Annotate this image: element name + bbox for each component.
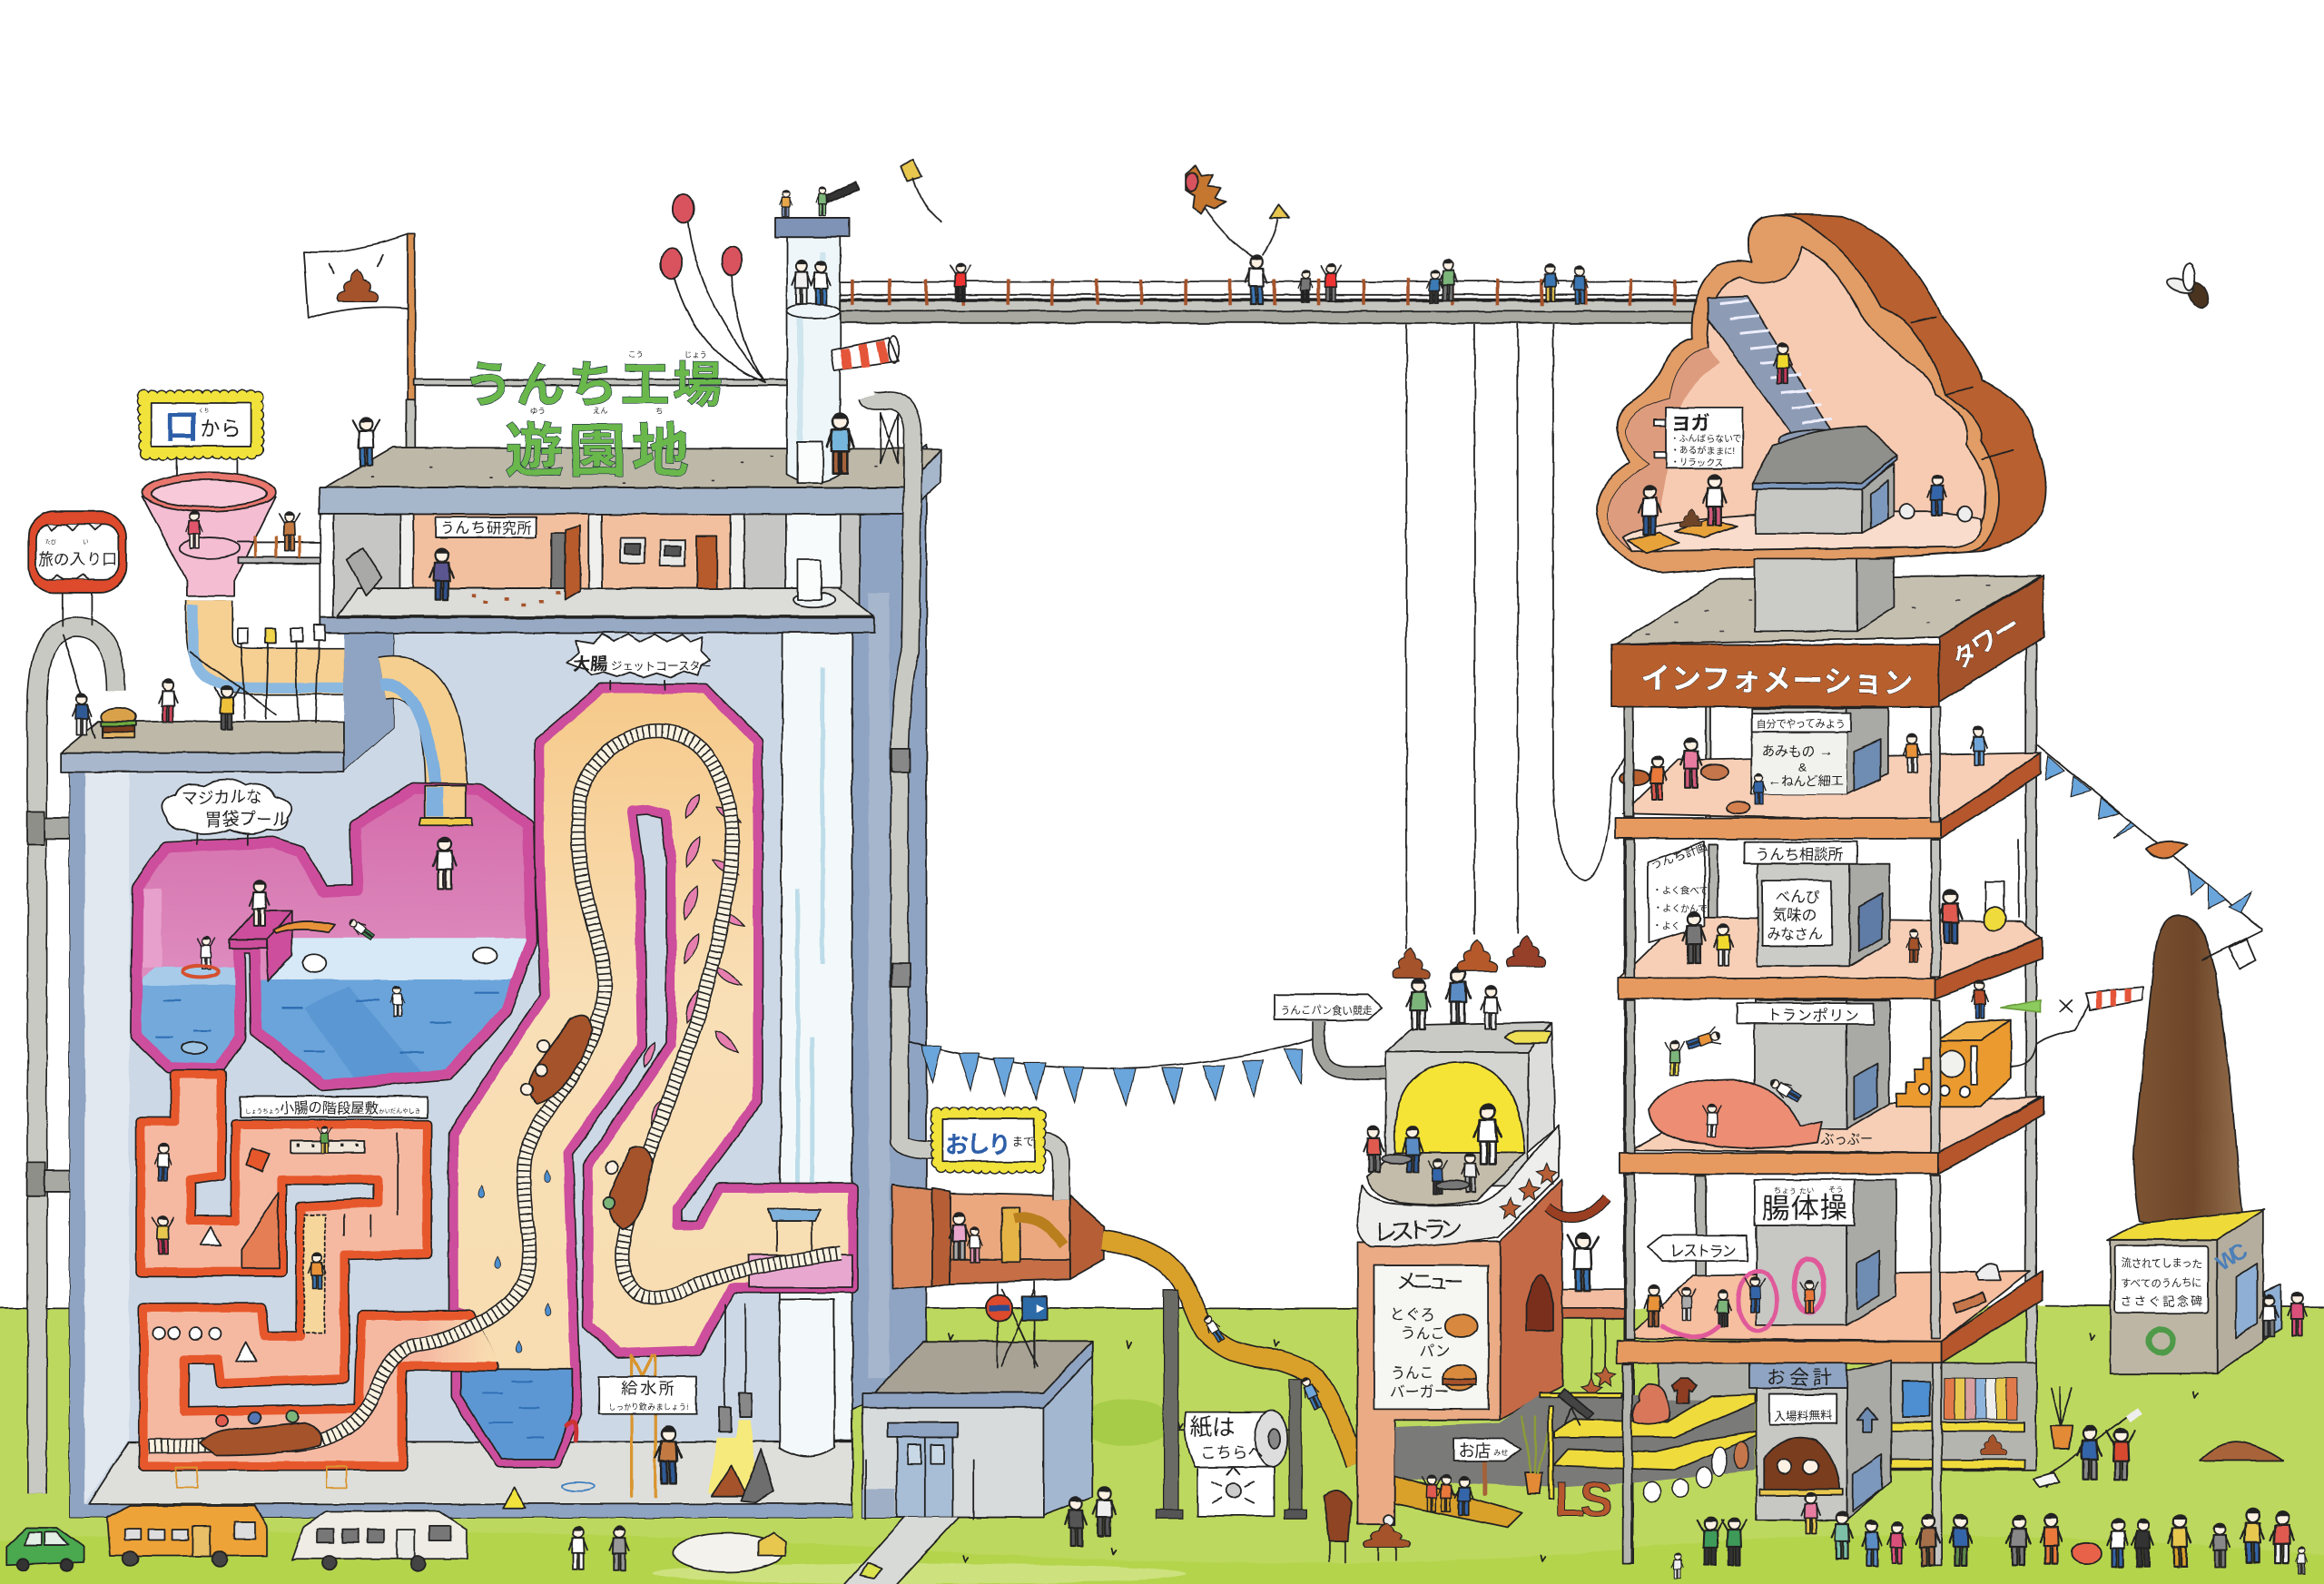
grass extras: dirt mound and flowerpot bbox=[2034, 1293, 2307, 1488]
board: うんち計画: うんち計画 bbox=[1649, 840, 1709, 872]
sign: 腸体操: たい bbox=[1799, 1186, 1814, 1195]
tower floor 2 trampoline: ぶっぷー bbox=[1820, 1133, 1874, 1147]
tower floor 4 bbox=[1616, 708, 2041, 839]
reservoir water bbox=[461, 1369, 572, 1460]
menu poster: パン bbox=[1420, 1343, 1450, 1360]
stacked dough pile bbox=[1633, 1384, 1669, 1425]
sign: うんち相談所: うんち相談所 bbox=[1755, 847, 1844, 863]
yellow shelves bbox=[1555, 1394, 1755, 1437]
information tower columns back bbox=[1624, 637, 2036, 1563]
telescope on shelf bbox=[1558, 1389, 1593, 1420]
ground floor shelves bbox=[1394, 1362, 2036, 1528]
sign: 口から: くち bbox=[197, 407, 209, 414]
hanging stars and restaurant walkway bbox=[1527, 1289, 1628, 1399]
title: うんち工場 遊園地: 遊園地 bbox=[506, 419, 689, 484]
menu poster: うんこ bbox=[1390, 1365, 1434, 1382]
sign: 自分でやってみよう: あみもの → bbox=[1762, 744, 1833, 760]
kites and poop balloons bbox=[901, 159, 1289, 260]
sign: トランポリン: トランポリン bbox=[1767, 1008, 1858, 1025]
sign: ヨガ: ・リラックス bbox=[1670, 457, 1723, 468]
factory main body bbox=[70, 445, 926, 1518]
hula hoop bbox=[1795, 1260, 1825, 1313]
sign: おしりまで: まで bbox=[1012, 1136, 1035, 1148]
menu poster: メニュー bbox=[1396, 1270, 1464, 1294]
title: うんち工場 遊園地: えん bbox=[593, 407, 607, 415]
leaves bbox=[645, 794, 744, 1127]
title: うんち工場 遊園地 bbox=[464, 350, 722, 484]
sign: 自分でやってみよう: ←ねんど細工 bbox=[1768, 773, 1844, 788]
sign: 腸体操: ちょう bbox=[1774, 1186, 1797, 1195]
plaque: 流されてしまった bbox=[2121, 1258, 2202, 1270]
sign: レストラン arrow bbox=[1648, 1235, 1748, 1261]
title: うんち工場 遊園地: うんち工場 bbox=[464, 358, 722, 412]
poster: べんぴ気味のみなさん: 気味の bbox=[1773, 908, 1817, 924]
ticket booth: 入場料無料 bbox=[1774, 1409, 1832, 1422]
ticket booth: お会計 bbox=[1767, 1367, 1832, 1389]
title: うんち工場 遊園地: ゆう bbox=[531, 407, 546, 415]
menu poster: バーガー bbox=[1390, 1384, 1450, 1401]
fly bbox=[2165, 264, 2211, 310]
large intestine jet coaster bbox=[454, 689, 852, 1462]
sign: うんこパン食い競走 bbox=[1275, 994, 1385, 1073]
sign: おしりまで: おしり bbox=[946, 1133, 1010, 1158]
sign: トランポリン bbox=[1737, 1003, 1874, 1025]
ticket booth bbox=[1748, 1361, 1891, 1533]
tower front columns bbox=[1623, 707, 1942, 1566]
sign: ヨガ: ヨガ bbox=[1672, 412, 1710, 434]
monument: giant poop bbox=[2107, 916, 2280, 1373]
digestive pipe to stomach bbox=[192, 600, 344, 688]
cat couple and plate bbox=[568, 1527, 587, 1569]
people on bridge bbox=[950, 264, 970, 301]
sign: 腸体操: 腸体操 bbox=[1762, 1193, 1848, 1225]
person looking up bbox=[827, 414, 853, 474]
small slide tail with kids bbox=[1394, 1476, 1522, 1528]
lookout tower with telescope bbox=[775, 182, 858, 483]
bunting left bbox=[909, 1038, 1315, 1106]
restaurant tower: レストラン bbox=[1374, 1215, 1463, 1246]
sign: ヨガ: ・あるがままに! bbox=[1670, 445, 1735, 457]
factory roof and research floor bbox=[319, 448, 941, 633]
coaster track bbox=[148, 732, 841, 1446]
orange bus bbox=[107, 1505, 267, 1556]
vehicles bbox=[6, 1505, 881, 1578]
sign: 腸体操: そう bbox=[1829, 1186, 1844, 1195]
plaque bbox=[2115, 1246, 2208, 1313]
title: うんち工場 遊園地: こう bbox=[628, 350, 644, 359]
flag stick bbox=[2202, 930, 2261, 960]
poster: べんぴ気味のみなさん: みなさん bbox=[1767, 925, 1823, 941]
board: うんち計画: ・よく bbox=[1652, 920, 1680, 931]
sign: うんち相談所 bbox=[1745, 841, 1857, 864]
sign: research lab: うんち研究所 bbox=[440, 521, 532, 537]
title: うんち工場 遊園地: ち bbox=[655, 407, 663, 415]
poster: べんぴ気味のみなさん: べんぴ bbox=[1776, 890, 1820, 906]
poster: べんぴ気味のみなさん bbox=[1762, 881, 1832, 945]
factory annex bbox=[845, 1341, 1092, 1584]
sign: マジカルな胃袋プール bbox=[162, 780, 291, 844]
small walkway and swimmer bbox=[237, 512, 320, 563]
sign: 口から bbox=[144, 396, 258, 454]
tube slide building: おしり bbox=[892, 1184, 1104, 1368]
valve and pipe to windsock bbox=[2011, 996, 2090, 1067]
sign: 給水所: 給水所 bbox=[621, 1380, 675, 1398]
sign: おしりまで bbox=[937, 1113, 1061, 1200]
floor workers and lamps bbox=[176, 1304, 773, 1509]
telescope bbox=[824, 182, 858, 203]
sign: 大腸ジェットコースター bbox=[566, 635, 712, 691]
sign: ヨガ bbox=[1654, 408, 1744, 468]
monument: giant poop: WC bbox=[2212, 1238, 2252, 1276]
sign: うんこパン食い競走: うんこパン食い競走 bbox=[1281, 1005, 1373, 1017]
sign: 小腸の階段屋敷 bbox=[241, 1097, 427, 1117]
person on roof bbox=[353, 418, 379, 466]
balloons bbox=[661, 194, 765, 382]
shop sign bbox=[1454, 1439, 1521, 1493]
plaque: ささぐ記念碑 bbox=[2121, 1294, 2202, 1308]
sign: 口から: 口 bbox=[164, 408, 199, 446]
no entry sign bbox=[986, 1295, 1012, 1322]
sign: レストラン arrow: レストラン bbox=[1669, 1244, 1737, 1260]
pipe outlet in stomach bbox=[426, 785, 466, 818]
person with sausage bbox=[1567, 1234, 1599, 1291]
information band sign bbox=[1611, 575, 2043, 707]
paper roll sign: 紙は bbox=[1190, 1414, 1235, 1440]
coaster cars bbox=[201, 1016, 652, 1455]
menu poster: とぐろ bbox=[1390, 1306, 1434, 1323]
diving platform bbox=[230, 911, 292, 940]
information band sign: タワー bbox=[1947, 610, 2024, 674]
sign: 自分でやってみよう: & bbox=[1799, 760, 1807, 773]
pedestal and tower roof bbox=[1616, 558, 2041, 644]
sign: 小腸の階段屋敷: しょうちょう小腸の階段屋敷かいだんやしき bbox=[245, 1099, 420, 1117]
hanging poop breads and strings bbox=[1392, 324, 1626, 978]
restaurant tower bbox=[1357, 968, 1607, 1525]
ground: green lawn bbox=[0, 1305, 2324, 1584]
tower floor 1 gymnastics bbox=[1617, 1179, 2043, 1363]
LS letters: LS bbox=[1555, 1472, 1612, 1527]
mouth sign: 旅の入り口: い bbox=[82, 538, 88, 546]
burger bbox=[101, 708, 136, 738]
mouth sign: 旅の入り口: 旅の入り口 bbox=[39, 550, 117, 568]
bunting right with bird bbox=[2038, 745, 2261, 929]
t-shirt bbox=[1672, 1378, 1697, 1403]
water drops bbox=[478, 1171, 550, 1353]
plaque: すべてのうんちに bbox=[2121, 1277, 2202, 1289]
board: うんち計画 bbox=[1648, 840, 1709, 942]
mouth sign: 旅の入り口: たび bbox=[44, 538, 57, 546]
information band sign: インフォメーション bbox=[1640, 661, 1914, 699]
diners bbox=[1364, 1127, 1384, 1172]
sign: 腸体操 bbox=[1755, 1179, 1854, 1225]
small intestine stairs bbox=[141, 1074, 498, 1465]
toilets bbox=[1644, 1441, 1748, 1502]
sign: ヨガ: ・ふんばらないで! bbox=[1670, 433, 1744, 444]
station bbox=[768, 1209, 820, 1221]
mouth sign: 旅の入り口 bbox=[28, 511, 126, 625]
flag and sign pole bbox=[304, 234, 787, 448]
entry pipe with arch bbox=[27, 626, 116, 1493]
menu poster bbox=[1374, 1265, 1488, 1409]
upper deck with burger and brushes bbox=[61, 625, 344, 772]
board: うんち計画: ・よくかんで bbox=[1652, 903, 1708, 914]
poop-shaped yoga dome bbox=[1597, 214, 2046, 574]
orange machine bbox=[1935, 1019, 2011, 1040]
sign: 自分でやってみよう: 自分でやってみよう bbox=[1757, 718, 1846, 730]
white bus bbox=[292, 1511, 467, 1560]
slide bbox=[1103, 1240, 1356, 1519]
plant pot bbox=[1525, 1473, 1543, 1493]
sign: マジカルな胃袋プール: 胃袋プール bbox=[204, 810, 290, 829]
funnel mouth bbox=[143, 396, 276, 595]
poop mascots and couples bbox=[1065, 1487, 1410, 1562]
pipe into stomach bbox=[381, 677, 447, 785]
paper roll sign bbox=[1178, 1411, 1289, 1516]
title: うんち工場 遊園地: じょう bbox=[684, 350, 707, 359]
sign: 口から: から bbox=[201, 417, 241, 440]
salmon trampoline balloon bbox=[1649, 1078, 1821, 1148]
sign: マジカルな胃袋プール: マジカルな bbox=[181, 789, 262, 807]
paper roll sign: こちらへ bbox=[1200, 1443, 1263, 1461]
windsock and drainpipe bbox=[832, 337, 934, 1150]
person walking in lab bbox=[430, 548, 453, 600]
arrow sign bbox=[1023, 1296, 1047, 1320]
stomach pool bbox=[133, 785, 537, 1098]
sign: 給水所: しっかり飲みましょう! bbox=[607, 1402, 689, 1411]
crowd at the bottom right bbox=[1672, 1509, 2308, 1578]
tower floor 3 bbox=[1619, 840, 2043, 999]
sign: 給水所 bbox=[599, 1356, 696, 1497]
sign: 自分でやってみよう bbox=[1752, 713, 1851, 794]
green car bbox=[6, 1528, 84, 1565]
people on roof with hanging breads bbox=[1407, 979, 1430, 1029]
shop sign: お店 bbox=[1458, 1442, 1491, 1461]
shop sign: みせ bbox=[1494, 1449, 1509, 1457]
sky bridge bbox=[841, 255, 1697, 323]
menu poster: うんこ bbox=[1401, 1325, 1445, 1342]
sign: 大腸ジェットコースター: 大腸 ジェットコースター bbox=[572, 654, 712, 674]
board: うんち計画: ・よく食べて bbox=[1652, 885, 1709, 896]
tower floor 2 trampoline bbox=[1620, 981, 2143, 1174]
